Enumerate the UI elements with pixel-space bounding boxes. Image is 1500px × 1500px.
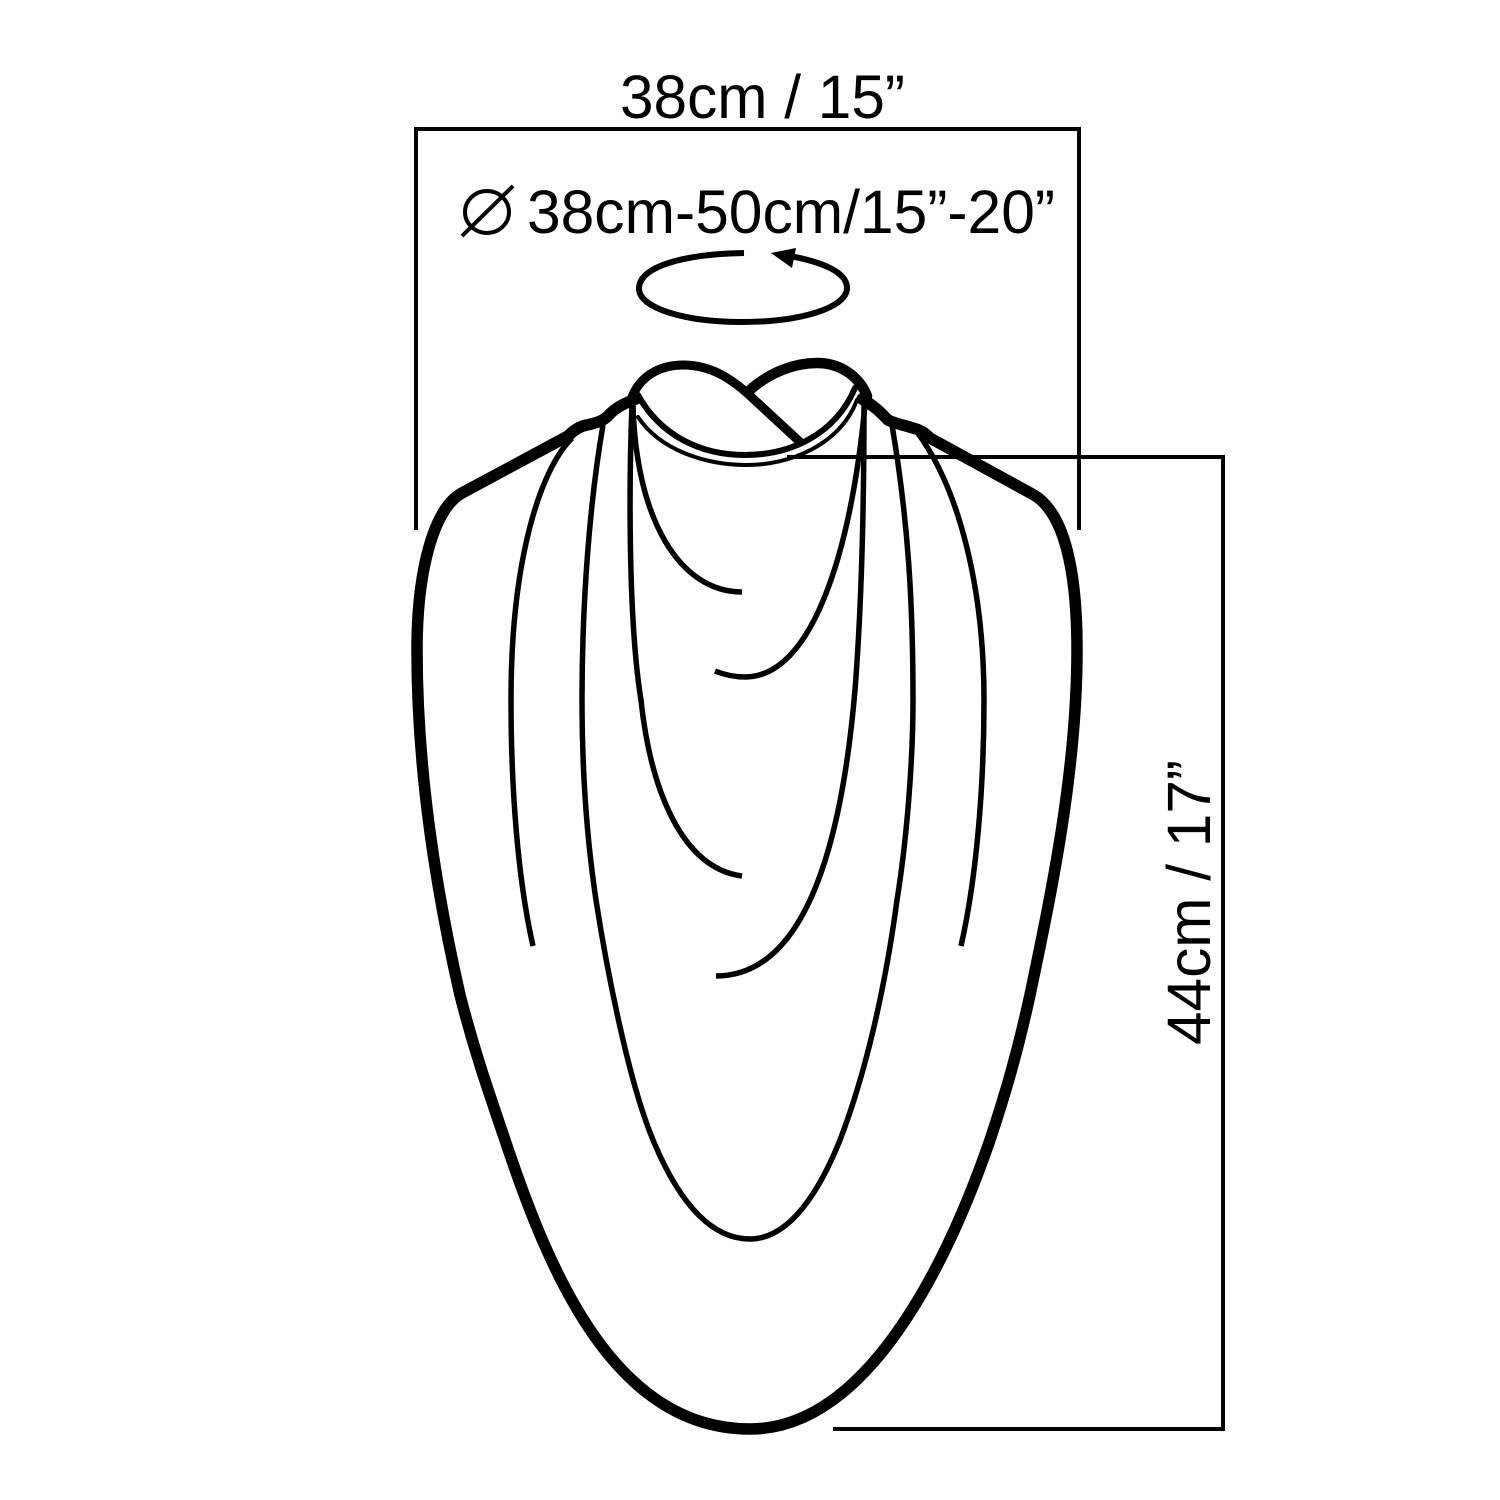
strand 7 outer right <box>917 432 984 946</box>
icon: rotation arrow <box>639 248 847 322</box>
neck collar lower edge <box>638 400 857 465</box>
icon: diameter symbol <box>462 186 513 236</box>
strand 6 outer left <box>511 438 572 946</box>
width dimension bracket <box>416 129 1079 530</box>
strand 4 mid right <box>716 405 864 976</box>
height dimension bracket <box>787 457 1223 1429</box>
strand 2 short right <box>715 405 865 677</box>
width label: 38cm / 15” <box>620 63 905 131</box>
neck collar front <box>638 388 855 455</box>
outer strand <box>417 399 1077 1429</box>
necklace illustration <box>417 363 1077 1429</box>
strand 1 short left <box>633 405 742 592</box>
circumference label: 38cm-50cm/15”-20” <box>527 178 1055 246</box>
strand 3 mid left <box>630 405 742 876</box>
height label: 44cm / 17” <box>1155 760 1223 1045</box>
strand 5 long loop <box>582 425 913 1239</box>
neck collar back left <box>632 365 800 442</box>
neck collar back right <box>750 363 867 396</box>
